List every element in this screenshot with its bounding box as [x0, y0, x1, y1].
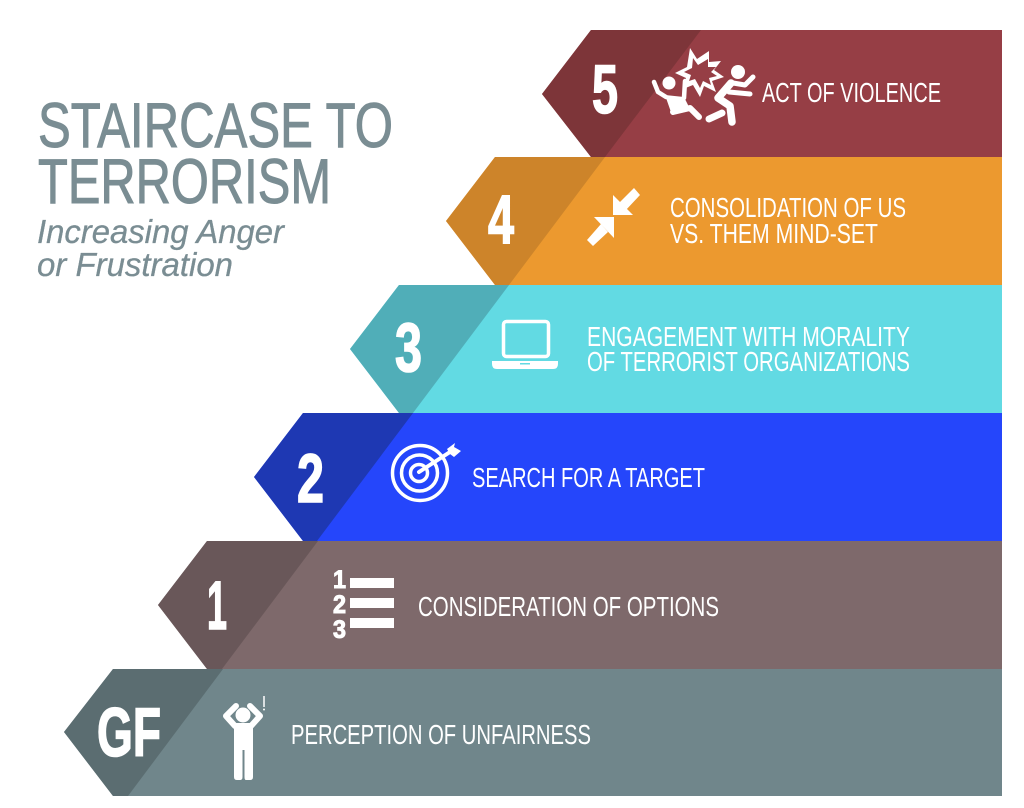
label: SEARCH FOR A TARGET	[472, 462, 705, 493]
icon: arrows pointing inward	[587, 188, 640, 246]
title: TERRORISM	[38, 147, 331, 217]
icon: person with hands on head	[226, 696, 265, 780]
icon: numbered list: 3	[333, 616, 346, 644]
title: STAIRCASE TO	[38, 91, 393, 161]
step 2: search for a target	[254, 413, 1002, 541]
icon: two figures and explosion	[654, 48, 753, 122]
title	[38, 91, 393, 217]
label: OF TERRORIST ORGANIZATIONS	[587, 346, 910, 377]
label: ENGAGEMENT WITH MORALITY	[587, 321, 910, 352]
step 1: consideration of options	[158, 541, 1002, 669]
subtitle: Increasing Anger	[37, 213, 286, 250]
step 5: act of violence	[542, 30, 1002, 157]
icon: numbered list: 1	[333, 566, 346, 594]
label	[670, 192, 906, 249]
icon: numbered list: 2	[333, 591, 346, 619]
icon: target with arrow	[392, 443, 461, 500]
number 3: 3	[395, 309, 422, 386]
label: VS. THEM MIND-SET	[670, 218, 878, 249]
subtitle: or Frustration	[37, 246, 233, 283]
number 1: 1	[207, 567, 227, 644]
step GF: perception of unfairness	[64, 669, 1002, 796]
label	[587, 321, 910, 377]
subtitle	[37, 213, 286, 283]
number 5: 5	[592, 51, 618, 128]
number 2: 2	[297, 440, 324, 517]
step 3: engagement	[350, 285, 1002, 413]
number 4: 4	[488, 181, 514, 258]
label: CONSOLIDATION OF US	[670, 192, 906, 223]
label GF: GF	[97, 694, 161, 771]
icon: laptop	[492, 322, 558, 369]
label: ACT OF VIOLENCE	[762, 77, 941, 108]
label: CONSIDERATION OF OPTIONS	[418, 591, 719, 622]
icon: numbered list	[333, 566, 394, 644]
step 4: consolidation	[446, 157, 1002, 285]
label: PERCEPTION OF UNFAIRNESS	[291, 719, 591, 750]
